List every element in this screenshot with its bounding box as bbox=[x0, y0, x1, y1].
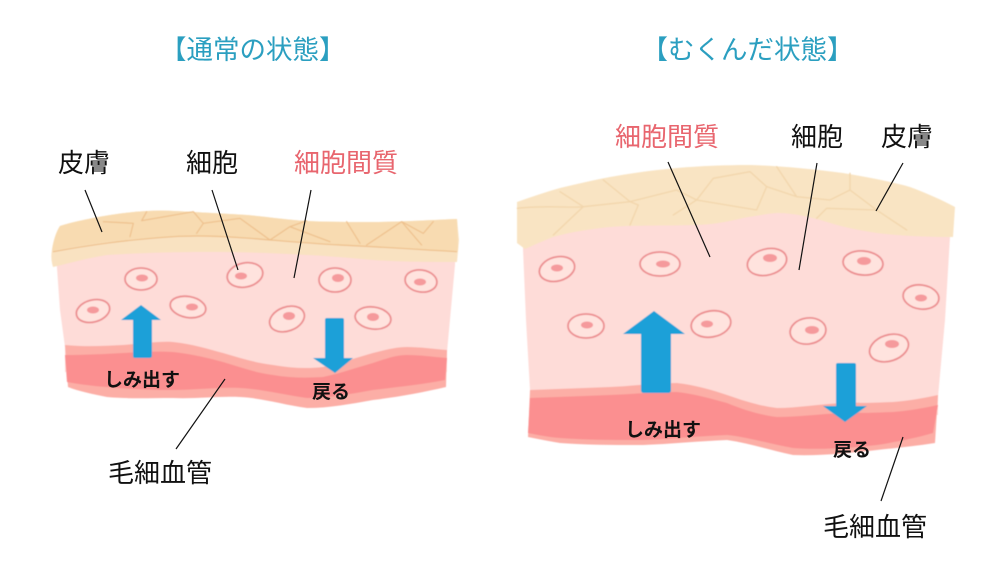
skin layer bbox=[517, 165, 955, 249]
capillary outer layer bbox=[528, 383, 938, 455]
arrow: down return bbox=[313, 318, 353, 373]
title: swollen state: 【むくんだ状態】 bbox=[642, 35, 854, 65]
label: seep out (swollen): しみ出す bbox=[625, 419, 701, 441]
cells bbox=[537, 244, 940, 367]
capillary inner layer bbox=[528, 392, 938, 449]
leader lines: swollen state bbox=[668, 162, 903, 501]
arrow: up seep out bbox=[121, 305, 161, 358]
label: return (swollen): 戻る bbox=[833, 440, 871, 461]
title: normal state: 【通常の状態】 bbox=[160, 35, 346, 65]
label: capillary (normal): 毛細血管 bbox=[108, 458, 212, 488]
interstitial tissue layer bbox=[523, 208, 950, 415]
skin cracks bbox=[517, 167, 907, 235]
skin shading bbox=[52, 211, 458, 251]
capillary inner layer bbox=[65, 352, 447, 398]
label: seep out (normal): しみ出す bbox=[104, 369, 180, 391]
arrow: up seep out bbox=[623, 311, 685, 393]
label: cell (normal): 細胞 bbox=[186, 148, 238, 178]
leader lines: normal state bbox=[85, 190, 311, 449]
panel: swollen skin diagram bbox=[517, 165, 955, 455]
skin layer bbox=[51, 211, 459, 267]
label: skin (normal): 皮膚 bbox=[58, 148, 110, 178]
label: interstitium (swollen): 細胞間質 bbox=[615, 122, 719, 152]
capillary outer layer bbox=[65, 342, 447, 408]
label: interstitium (normal): 細胞間質 bbox=[294, 148, 398, 178]
label: cell (swollen): 細胞 bbox=[791, 122, 843, 152]
interstitial tissue layer bbox=[55, 240, 456, 372]
label: skin (swollen): 皮膚 bbox=[881, 122, 933, 152]
label: return (normal): 戻る bbox=[312, 382, 350, 403]
arrow: down return bbox=[823, 363, 867, 422]
skin cracks bbox=[53, 212, 457, 252]
panel: normal skin diagram bbox=[51, 211, 459, 408]
label: capillary (swollen): 毛細血管 bbox=[823, 512, 927, 542]
cells bbox=[74, 260, 438, 336]
